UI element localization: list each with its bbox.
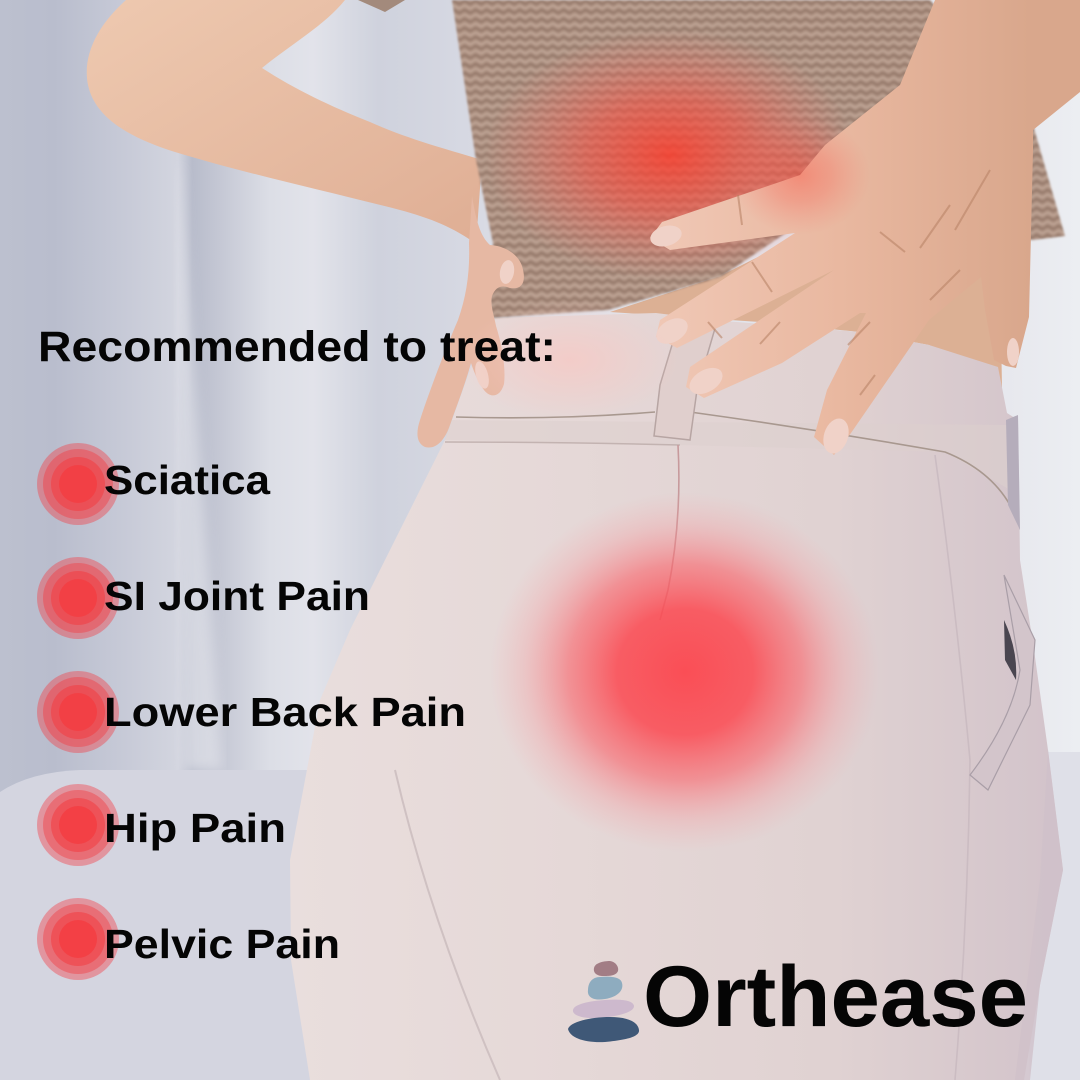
item: SI Joint Pain: SI Joint Pain [104,573,370,619]
right arm and hand [650,0,1080,455]
wordmark: Orthease [643,949,1028,1045]
item: SI Joint Pain [37,557,370,639]
item: Sciatica: Sciatica [104,457,271,503]
pants [290,313,1063,1080]
item: Hip Pain [37,784,286,866]
left arm [87,0,482,244]
knuckle shading [708,170,990,395]
item: Pelvic Pain [37,898,340,980]
hand glow [730,115,870,235]
fingernails [473,222,1019,457]
knit sweater [452,0,1065,318]
list: conditions treated [37,443,466,980]
item: Hip Pain: Hip Pain [104,805,286,851]
item: Lower Back Pain: Lower Back Pain [104,689,466,735]
waistband tint [460,300,680,420]
item: Sciatica [37,443,271,525]
hip pain glow [490,492,880,852]
pants details [395,325,1063,1080]
logo: Orthease [568,949,1028,1045]
shirt sleeve hint [358,0,405,12]
sweater pain glow [485,30,855,280]
left hand fingers [417,196,524,448]
item: Lower Back Pain [37,671,466,753]
heading: Recommended to treat: [38,323,556,371]
exposed waist skin [610,236,1002,388]
icon: balanced stones [568,961,639,1042]
item: Pelvic Pain: Pelvic Pain [104,921,340,967]
